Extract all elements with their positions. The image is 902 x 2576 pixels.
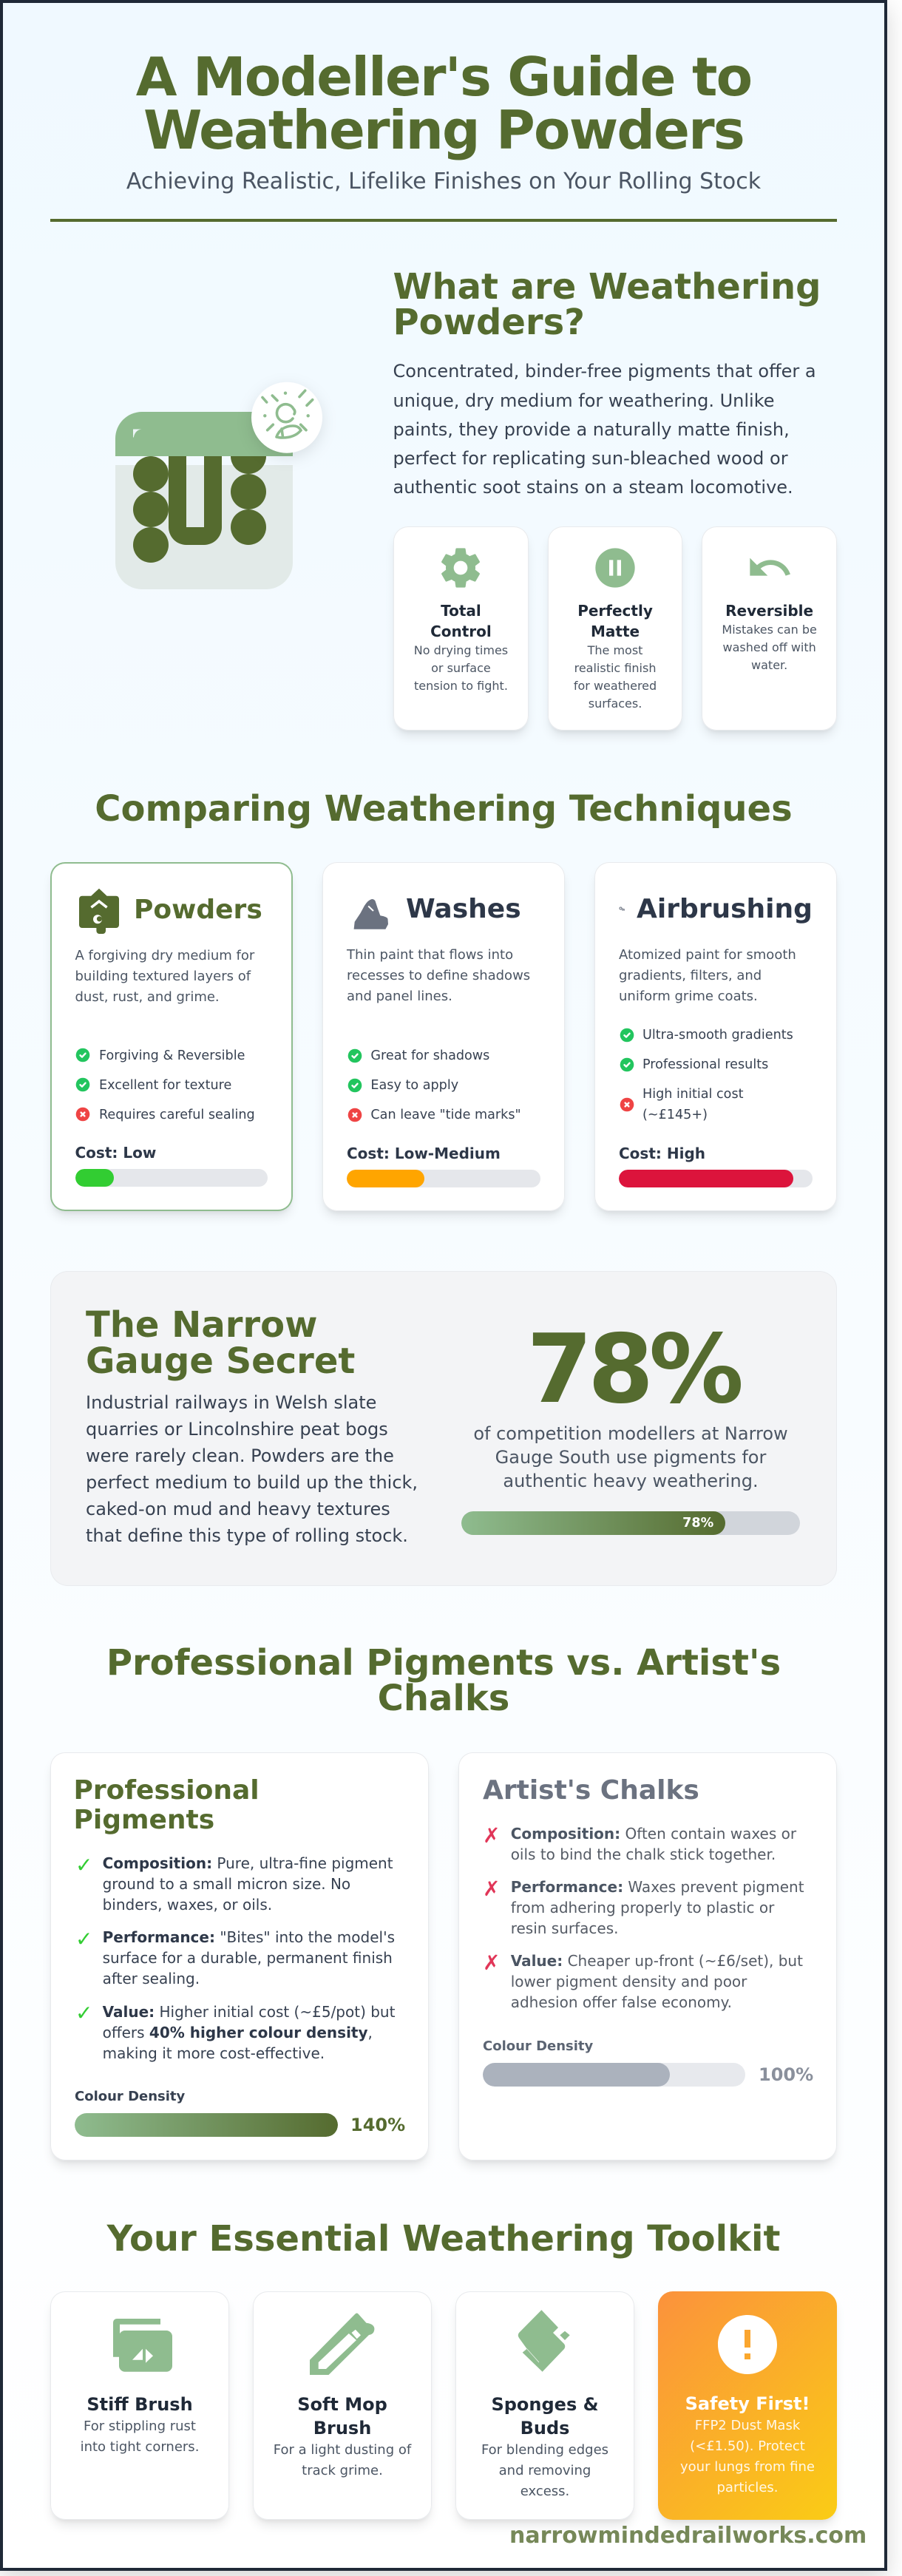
panel text: were rarely clean. Powders are the (86, 1445, 394, 1466)
point: value: ✗ (483, 1950, 500, 1975)
card title: Airbrushing (637, 893, 813, 924)
pros and cons: (~£145+) (642, 1108, 708, 1122)
pros and cons: Great for shadows (370, 1048, 489, 1063)
icon: powder pot (79, 889, 119, 934)
intro heading: What are Weathering (393, 266, 821, 308)
icon: warning (712, 2309, 783, 2380)
tool name: Buds (520, 2418, 569, 2438)
point: performance: Performance: Waxes prevent pigment (511, 1878, 804, 1896)
header rule (50, 219, 837, 222)
density value: 100% (759, 2064, 813, 2085)
density value: 140% (350, 2115, 405, 2135)
point: composition: ground to a small micron size. No (103, 1875, 350, 1893)
panel heading: The Narrow (86, 1304, 317, 1346)
point: composition: Composition: Pure, ultra-fine pigment (103, 1854, 393, 1872)
intro paragraph: perfect for replicating sun-bleached wood or (393, 448, 788, 469)
pros and cons: Requires careful sealing (99, 1108, 255, 1122)
tool text: For blending edges (481, 2442, 608, 2458)
icon: wash blob (353, 899, 388, 929)
density label: Colour Density (483, 2038, 593, 2054)
card description: building textured layers of (75, 969, 251, 984)
statistic caption: of competition modellers at Narrow (473, 1423, 788, 1444)
panel text: quarries or Lincolnshire peat bogs (86, 1419, 388, 1440)
card heading: Artist's Chalks (483, 1775, 699, 1806)
point: composition: binders, waxes, or oils. (103, 1896, 272, 1914)
big statistic: 78% (526, 1315, 739, 1425)
pros and cons: Ultra-smooth gradients (642, 1028, 793, 1043)
pros and cons: Forgiving & Reversible (99, 1048, 245, 1063)
technique card: powders (50, 862, 293, 1211)
card title: Powders (134, 895, 262, 924)
feature text: realistic finish (574, 661, 656, 675)
point: performance: after sealing. (103, 1970, 200, 1987)
point: composition: ✓ (75, 1853, 92, 1877)
pros and cons (620, 1028, 793, 1122)
feature title: Matte (591, 623, 640, 640)
card description: uniform grime coats. (619, 989, 758, 1004)
progress bar: 78%: 78% (682, 1516, 713, 1531)
panel text (86, 1392, 418, 1546)
title: A Modeller's Guide to (136, 46, 751, 108)
intro heading: Powders? (393, 302, 585, 343)
feature text: washed off with (722, 640, 816, 654)
card description: A forgiving dry medium for (75, 948, 254, 963)
point: value: adhesion offer false economy. (511, 1993, 732, 2011)
section heading: pigments vs chalks: Chalks (378, 1678, 509, 1719)
point: performance: from adhering properly to plastic or (511, 1899, 774, 1916)
tool text: excess. (520, 2484, 569, 2499)
feature title: Control (430, 623, 492, 640)
title (136, 46, 751, 161)
intro paragraph (393, 361, 816, 498)
tool text: and removing (499, 2463, 591, 2478)
illustration: powder pot with sparkle badge (115, 382, 325, 589)
card description: gradients, filters, and (619, 968, 762, 983)
safety text: (<£1.50). Protect (690, 2438, 805, 2454)
cost bar (619, 1170, 813, 1187)
section heading: pigments vs chalks: Professional Pigments vs. Artist's (106, 1642, 781, 1684)
panel text: that define this type of rolling stock. (86, 1525, 408, 1546)
point: performance: resin surfaces. (511, 1919, 618, 1937)
feature card: perfectly matte (548, 526, 682, 731)
point: performance: surface for a durable, permanent finish (103, 1949, 393, 1967)
intro paragraph: authentic soot stains on a steam locomotive. (393, 477, 793, 498)
intro paragraph: unique, dry medium for weathering. Unlike (393, 390, 775, 411)
point: composition (75, 1853, 393, 1914)
feature text: water. (751, 658, 787, 672)
feature text: tension to fight. (414, 679, 508, 693)
point: value: offers 40% higher colour density, (103, 2023, 373, 2041)
icon: tiny airbrush (620, 906, 625, 911)
cost bar (75, 1169, 268, 1187)
safety text: your lungs from fine (680, 2459, 815, 2475)
point: composition: Composition: Often contain waxes or (511, 1825, 796, 1843)
header (50, 46, 837, 222)
point: performance (75, 1927, 395, 1987)
panel text: caked-on mud and heavy textures (86, 1499, 390, 1519)
cost label: Cost: Low-Medium (347, 1145, 501, 1162)
pros and cons: Professional results (642, 1057, 768, 1072)
point: value: making it more cost-effective. (103, 2044, 325, 2061)
tool card: soft mop brush (253, 2291, 432, 2520)
feature text: for weathered (574, 679, 657, 693)
feature text (414, 643, 508, 693)
density bar: 100% (483, 2063, 745, 2087)
cost bar (347, 1170, 540, 1187)
point: value (483, 1950, 803, 2011)
point: composition: oils to bind the chalk stick together. (511, 1845, 776, 1863)
feature text (722, 623, 817, 672)
card description: dust, rust, and grime. (75, 989, 220, 1005)
icon: pause circle (595, 548, 635, 588)
section heading: pigments vs chalks (106, 1642, 781, 1719)
density bar: 140% (75, 2113, 338, 2137)
panel heading (86, 1304, 355, 1382)
safety title: Safety First! (685, 2393, 810, 2414)
card description (75, 948, 254, 1005)
pros and cons: Easy to apply (370, 1078, 458, 1093)
pros and cons (75, 1048, 255, 1122)
feature card: reversible (702, 526, 837, 731)
progress bar: 78% (461, 1511, 800, 1535)
icon: soft mop brush (310, 2313, 374, 2375)
feature title (430, 602, 492, 640)
pros and cons: High initial cost (642, 1087, 744, 1102)
section heading: toolkit: Your Essential Weathering Toolkit (107, 2218, 780, 2260)
icon: gear (441, 548, 480, 588)
feature text: The most (588, 643, 642, 657)
comparison card: artist's chalks (458, 1752, 837, 2160)
tool card: stiff brush (50, 2291, 229, 2520)
feature title: Total (441, 602, 481, 620)
card description: and panel lines. (347, 989, 452, 1004)
icon: sponge (518, 2310, 570, 2372)
technique card: airbrushing (594, 862, 837, 1211)
panel text: perfect medium to build up the thick, (86, 1472, 418, 1493)
card description: recesses to define shadows (347, 968, 530, 983)
comparison card: professional pigments (50, 1752, 429, 2160)
icon: stiff brush (113, 2319, 172, 2372)
tool name: Brush (313, 2418, 371, 2438)
tool text: For stippling rust (84, 2419, 196, 2434)
tool name: Sponges & (491, 2394, 599, 2415)
point: performance: ✗ (483, 1877, 500, 1901)
intro paragraph: Concentrated, binder-free pigments that offer a (393, 361, 816, 382)
safety text: particles. (717, 2480, 778, 2495)
cost label: Cost: High (619, 1145, 705, 1162)
pros and cons (347, 1048, 521, 1122)
technique card: washes (322, 862, 565, 1211)
density label: Colour Density (75, 2089, 185, 2104)
point: performance: ✓ (75, 1927, 92, 1951)
card heading (74, 1775, 260, 1835)
card heading: Professional (74, 1775, 260, 1806)
tool text (455, 2440, 634, 2502)
card description: Atomized paint for smooth (619, 947, 796, 963)
intro heading (393, 266, 821, 343)
panel: narrow gauge secret (50, 1271, 837, 1586)
feature title: Reversible (725, 602, 813, 620)
feature title: Perfectly (577, 602, 653, 620)
point: value: lower pigment density and poor (511, 1973, 747, 1990)
tool card: sponges and buds (455, 2291, 634, 2520)
point: performance (483, 1877, 804, 1937)
footer url: narrowmindedrailworks.com (509, 2523, 867, 2549)
card title: Washes (406, 893, 521, 924)
card description (619, 947, 796, 1004)
statistic caption: authentic heavy weathering. (503, 1471, 759, 1491)
section heading: comparing techniques: Comparing Weathering Techniques (95, 788, 793, 830)
feature text: surfaces. (589, 696, 642, 711)
tool text: For a light dusting of (274, 2442, 411, 2458)
tool text (274, 2442, 412, 2478)
point: value (75, 2001, 395, 2061)
card description: Thin paint that flows into (347, 947, 513, 963)
tool text: track grime. (302, 2463, 383, 2478)
tool name: Soft Mop (297, 2394, 387, 2415)
safety text (658, 2416, 837, 2498)
tool name: Stiff Brush (87, 2394, 193, 2415)
point: value: Value: Higher initial cost (~£5/pot) but (103, 2002, 395, 2020)
tool text: into tight corners. (81, 2439, 199, 2455)
tool text (81, 2419, 199, 2455)
feature text: or surface (431, 661, 491, 675)
card heading: Pigments (74, 1804, 214, 1835)
pros and cons: Can leave "tide marks" (370, 1108, 521, 1122)
feature card: total control (393, 526, 529, 731)
point: composition: ✗ (483, 1823, 500, 1848)
panel text: Industrial railways in Welsh slate (86, 1392, 376, 1413)
point: value: Value: Cheaper up-front (~£6/set), but (511, 1952, 803, 1970)
pros and cons: Excellent for texture (99, 1078, 231, 1093)
title: Weathering Powders (143, 99, 744, 161)
safety text: FFP2 Dust Mask (695, 2418, 800, 2433)
tool name (297, 2394, 387, 2438)
tool card: safety first (658, 2291, 837, 2520)
feature text (574, 643, 657, 711)
panel heading: Gauge Secret (86, 1340, 355, 1382)
feature title (577, 602, 653, 640)
feature text: No drying times (414, 643, 508, 657)
point: value: ✓ (75, 2001, 92, 2025)
subtitle: Achieving Realistic, Lifelike Finishes on Your Rolling Stock (126, 169, 761, 194)
statistic caption (473, 1423, 788, 1491)
cost label: Cost: Low (75, 1144, 156, 1162)
point: composition (483, 1823, 797, 1863)
statistic caption: Gauge South use pigments for (495, 1447, 766, 1468)
feature text: Mistakes can be (722, 623, 817, 637)
point: performance: Performance: "Bites" into the model's (103, 1928, 395, 1946)
card description (346, 947, 530, 1004)
icon: undo arrow (750, 557, 790, 576)
intro paragraph: paints, they provide a naturally matte finish, (393, 419, 790, 440)
tool name (491, 2394, 599, 2438)
